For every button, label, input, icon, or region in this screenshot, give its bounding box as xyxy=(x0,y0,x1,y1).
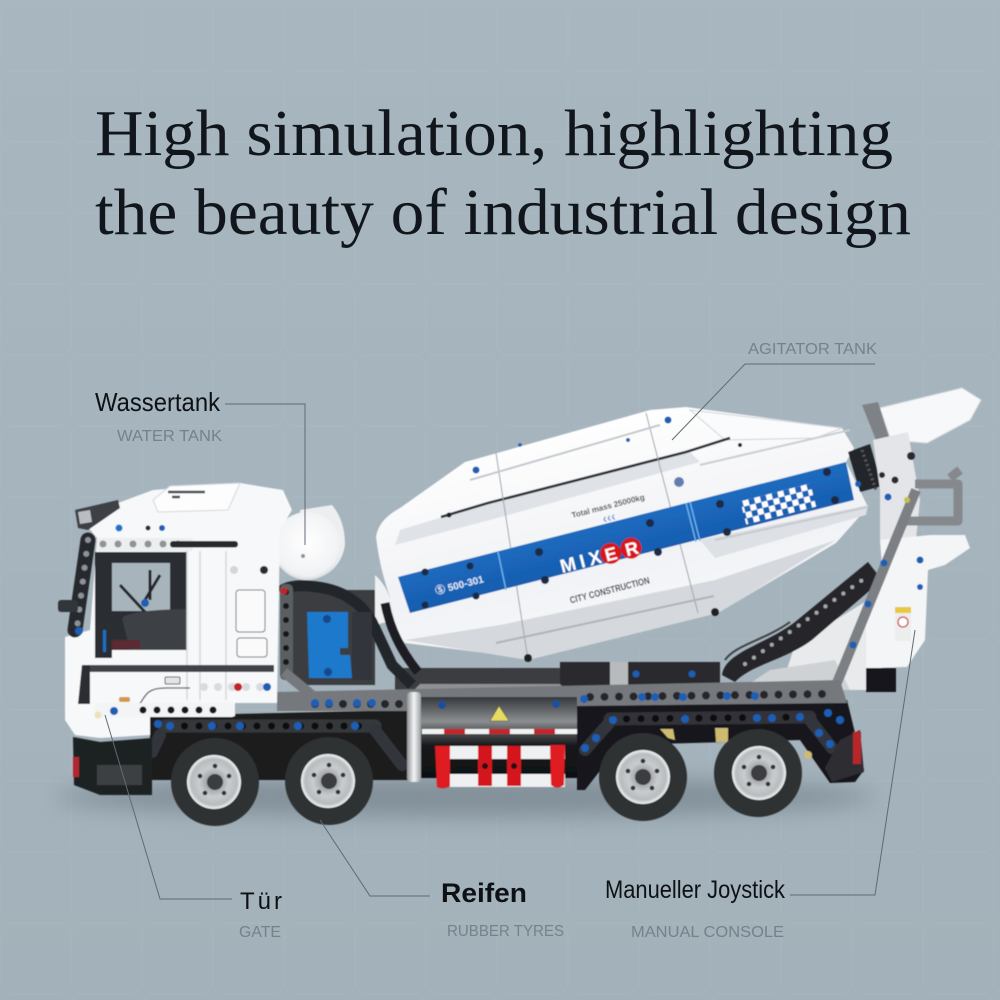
visor xyxy=(75,500,120,530)
callout: rubber tyres xyxy=(320,820,564,940)
angled links xyxy=(152,720,832,765)
beam stack xyxy=(873,432,920,540)
right cone shadow xyxy=(700,505,868,558)
black front lattice xyxy=(75,540,88,630)
warning triangle xyxy=(490,706,509,721)
callout: manual console xyxy=(605,630,915,941)
grey upright xyxy=(280,584,293,680)
chute head xyxy=(880,388,981,443)
drum seams xyxy=(441,413,868,660)
window frame xyxy=(95,552,187,650)
callout: gate: GATE xyxy=(239,924,281,941)
wheel 4 xyxy=(714,729,802,817)
diagonal beam xyxy=(834,490,916,690)
agitator drum xyxy=(376,407,868,662)
wheel 2 xyxy=(285,737,373,825)
side guard xyxy=(435,745,565,788)
callout: agitator tank xyxy=(672,341,877,440)
mirror stub xyxy=(58,600,78,612)
callout: manual console: Manueller Joystick xyxy=(605,876,785,904)
blue band xyxy=(398,462,854,613)
roof pins xyxy=(116,524,122,532)
rear bumper xyxy=(825,730,864,782)
warning sticker xyxy=(895,607,911,641)
upper shadow panel xyxy=(395,452,700,545)
blue block xyxy=(307,612,352,678)
callout: rubber tyres: RUBBER TYRES xyxy=(447,923,564,940)
side pin row xyxy=(204,683,272,691)
capacity text: Total mass 25000kg xyxy=(571,493,646,520)
cab xyxy=(58,483,292,795)
blue chevrons: ‹‹‹ xyxy=(601,508,617,526)
yellow clips xyxy=(660,728,812,759)
window glass xyxy=(110,563,170,611)
striped band xyxy=(422,729,577,734)
callout: gate xyxy=(105,715,282,941)
lower shade strip xyxy=(405,540,836,660)
callout: gate: Tür xyxy=(240,888,282,915)
callout: water tank: WATER TANK xyxy=(117,428,222,445)
title: the beauty of industrial design xyxy=(95,176,911,249)
callout: water tank: Wassertank xyxy=(95,387,221,417)
city construction: CITY CONSTRUCTION xyxy=(569,575,651,606)
door seams xyxy=(187,551,226,700)
pillar xyxy=(95,553,112,658)
drum bearing xyxy=(848,444,882,492)
door panel outlines xyxy=(236,590,265,632)
wheels xyxy=(171,729,802,826)
white step beam xyxy=(95,703,235,717)
upper studded bar xyxy=(97,538,193,551)
ground shadow xyxy=(55,777,875,817)
black bumper xyxy=(73,737,152,795)
dark frame mass xyxy=(150,710,410,780)
chassis xyxy=(150,680,864,790)
hoses and blue block xyxy=(280,575,418,696)
lower door line xyxy=(135,688,190,706)
title xyxy=(95,97,911,249)
water tank xyxy=(273,505,345,580)
checker decal xyxy=(740,483,816,525)
front grille edge xyxy=(78,665,90,704)
white column xyxy=(866,535,970,668)
title: High simulation, highlighting xyxy=(95,97,893,170)
grey pipes xyxy=(905,470,960,521)
callout: agitator tank: AGITATOR TANK xyxy=(748,341,877,358)
mixer logo: R xyxy=(623,538,641,560)
seat xyxy=(122,609,187,650)
mixer logo: MIX xyxy=(558,547,604,578)
cab shell xyxy=(65,483,292,738)
callout: rubber tyres: Reifen xyxy=(441,878,527,908)
model number: Ⓢ 500-301 xyxy=(434,572,485,597)
blue pins xyxy=(166,692,844,752)
roof panel xyxy=(153,483,240,512)
top flap xyxy=(690,410,842,440)
cab dark stripe xyxy=(90,665,274,672)
wheel 1 xyxy=(171,738,259,826)
mixer truck xyxy=(58,388,981,826)
callout: manual console: MANUAL CONSOLE xyxy=(631,924,784,941)
band pins xyxy=(422,468,839,608)
upper grey rail xyxy=(277,680,847,711)
mixer logo xyxy=(558,535,644,578)
drum body xyxy=(376,407,868,660)
grey post xyxy=(862,402,890,445)
drum pins xyxy=(472,416,684,487)
rear frame and lattice arm xyxy=(395,562,885,694)
fuel tank and side guard xyxy=(407,692,577,788)
mixer logo: E xyxy=(603,543,619,566)
wheel 3 xyxy=(599,733,687,821)
lower black rail xyxy=(165,720,375,732)
callout: water tank xyxy=(95,387,305,545)
rear column and chute xyxy=(828,388,981,694)
black handle xyxy=(170,541,238,548)
